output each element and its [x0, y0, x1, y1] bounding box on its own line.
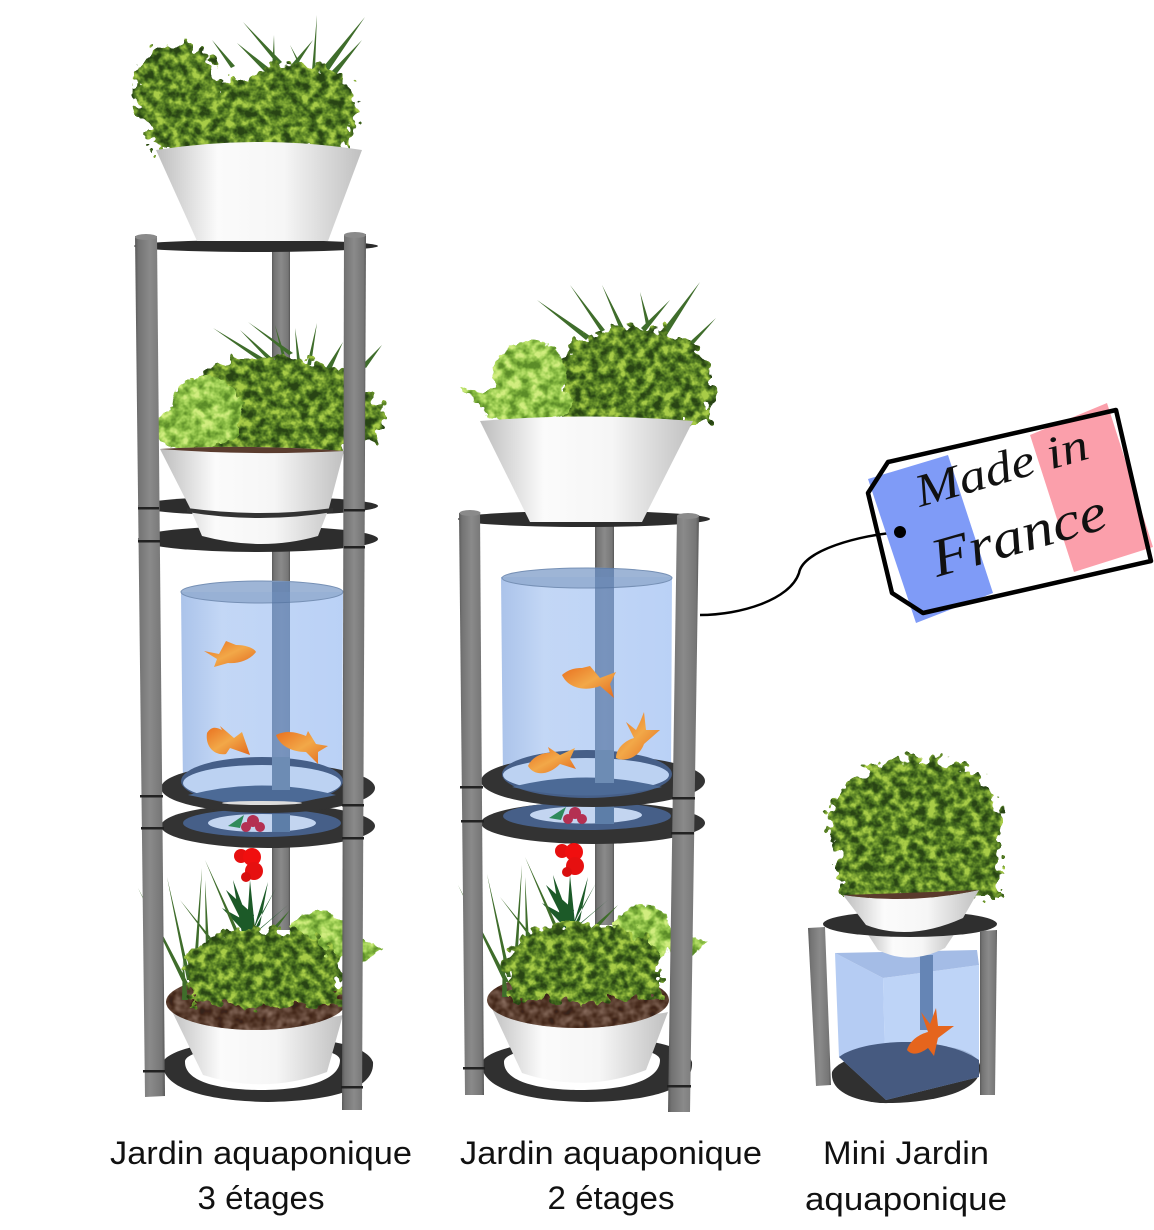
goldfish [907, 1008, 954, 1056]
top pot grass [212, 15, 365, 80]
caption: three tiers: 3 étages [198, 1180, 324, 1216]
tomato plant [542, 843, 608, 933]
three-tier aquaponic tower [133, 15, 384, 1110]
caption: two tiers [460, 1135, 762, 1216]
lower shelf discs with opening [161, 757, 375, 848]
connector string [700, 532, 900, 615]
upper pot foliage [561, 328, 714, 425]
tag text line 1: Made in [908, 419, 1094, 517]
middle pot lettuce [143, 376, 242, 450]
French flag colours [868, 403, 1153, 623]
top pot foliage [133, 42, 358, 150]
caption: three tiers: Jardin aquaponique [110, 1135, 412, 1171]
fish tank [181, 581, 343, 802]
upper pot grass [537, 282, 716, 354]
bottom shelf ring [482, 1038, 692, 1102]
lower pot [865, 930, 957, 958]
tomato plant [222, 848, 288, 938]
front posts [135, 236, 165, 1097]
fish tank [501, 568, 672, 792]
post collars [138, 507, 365, 1088]
two-tier aquaponic tower [458, 282, 716, 1112]
parsley foliage [829, 758, 1001, 897]
bottom shelf ring [163, 1038, 373, 1102]
caption: two tiers: 2 étages [548, 1180, 674, 1216]
bottom pot grass and lettuce [138, 860, 383, 1000]
top shelf disc [134, 240, 378, 252]
shelf disc [823, 911, 997, 937]
bottom plant pot [488, 1000, 668, 1083]
tag outline [868, 410, 1151, 613]
lower shelf discs with opening [481, 750, 705, 844]
front posts [459, 512, 484, 1095]
bottom pot foliage [184, 928, 340, 1008]
second shelf discs [138, 496, 378, 552]
middle grass [213, 322, 382, 372]
fish tank cube [835, 950, 979, 1100]
upper plant pot [480, 416, 693, 522]
goldfish [204, 641, 328, 764]
caption: mini [805, 1135, 1007, 1217]
top plant pot [156, 142, 362, 241]
post collars [460, 786, 695, 1088]
goldfish [528, 666, 660, 773]
base disc [832, 1045, 980, 1103]
mini aquaponic garden [808, 758, 1001, 1103]
bottom pot grass and lettuce [458, 857, 708, 997]
middle pot foliage [182, 356, 384, 454]
caption: three tiers [110, 1135, 412, 1216]
bottom plant pot [168, 1003, 343, 1084]
middle plant pot [160, 447, 344, 544]
tag text line 2: France [923, 481, 1113, 589]
caption: mini: Mini Jardin [823, 1135, 989, 1171]
upper shelf disc [458, 511, 710, 527]
upper pot [843, 890, 979, 932]
upper pot lettuce [461, 341, 573, 422]
posts [808, 927, 831, 1086]
made in France tag [868, 403, 1153, 623]
caption: mini: aquaponique [805, 1181, 1007, 1217]
caption: two tiers: Jardin aquaponique [460, 1135, 762, 1171]
bottom pot foliage [504, 923, 660, 1003]
